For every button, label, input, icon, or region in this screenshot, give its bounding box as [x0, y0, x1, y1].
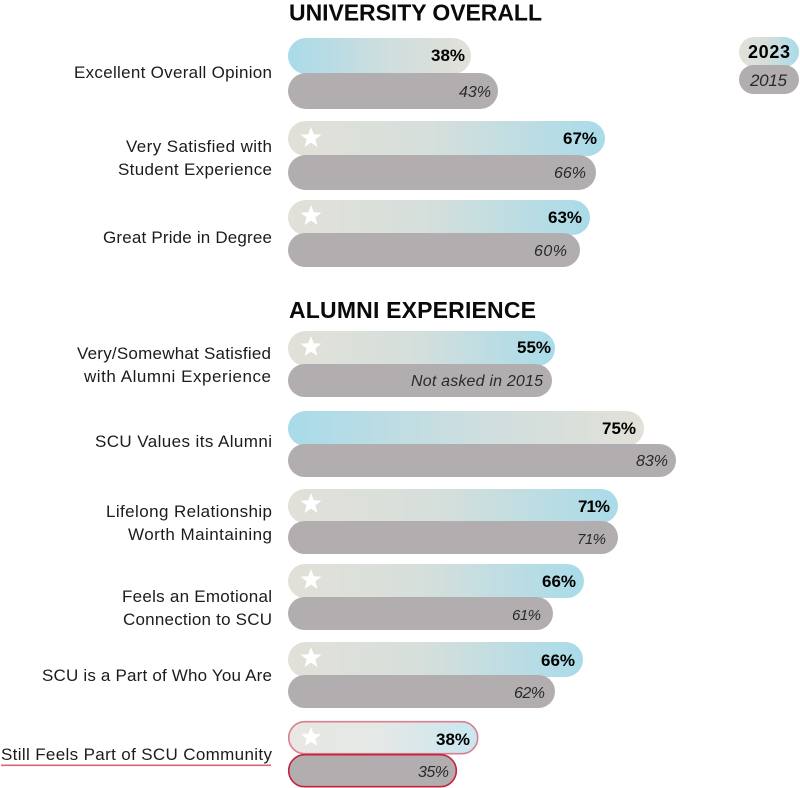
- row: Great Pride in Degree: Great Pride in Degree: [103, 228, 272, 247]
- row: Very Satisfied with Student Experience: 66%: [554, 165, 586, 182]
- heading: Alumni Experience: ALUMNI EXPERIENCE: [289, 297, 536, 323]
- row: Feels an Emotional Connection to SCU: 61%: [512, 607, 541, 624]
- row: Very Satisfied with Student Experience: [118, 121, 605, 190]
- row: Feels an Emotional Connection to SCU: Feels an Emotional: [122, 587, 272, 606]
- row: Very/Somewhat Satisfied with Alumni Experience: Very/Somewhat Satisfied: [77, 344, 271, 363]
- row: Still Feels Part of SCU Community (highlighted): [1, 722, 478, 787]
- row: Feels an Emotional Connection to SCU: [122, 564, 584, 630]
- row: Excellent Overall Opinion: [74, 38, 498, 109]
- legend: [739, 37, 799, 94]
- row: Lifelong Relationship Worth Maintaining: 71%: [577, 531, 606, 548]
- row: Very Satisfied with Student Experience: Very Satisfied with: [126, 137, 272, 156]
- legend: 2023: [748, 42, 790, 62]
- row: Very Satisfied with Student Experience: Student Experience: [118, 160, 272, 179]
- heading: University Overall: UNIVERSITY OVERALL: [289, 0, 542, 26]
- row: Still Feels Part of SCU Community (highlighted): 35%: [418, 764, 449, 781]
- row: SCU Values its Alumni: [95, 411, 676, 477]
- row: SCU Values its Alumni: 83%: [636, 453, 668, 470]
- row: Great Pride in Degree: 60%: [534, 243, 567, 260]
- row: Excellent Overall Opinion: 43%: [459, 84, 491, 101]
- row: Lifelong Relationship Worth Maintaining: Lifelong Relationship: [106, 502, 272, 521]
- row: Excellent Overall Opinion: 38%: [431, 46, 465, 65]
- row: Still Feels Part of SCU Community (highlighted): Still Feels Part of SCU Community: [1, 745, 272, 764]
- row: Feels an Emotional Connection to SCU: Connection to SCU: [123, 610, 272, 629]
- row: Very/Somewhat Satisfied with Alumni Experience: Not asked in 2015: [411, 373, 543, 390]
- row: Lifelong Relationship Worth Maintaining: Worth Maintaining: [128, 525, 272, 544]
- row: SCU is a Part of Who You Are: SCU is a Part of Who You Are: [42, 666, 272, 685]
- row: Lifelong Relationship Worth Maintaining: 71%: [578, 497, 610, 516]
- row: Excellent Overall Opinion: Excellent Overall Opinion: [74, 63, 272, 82]
- row: Very Satisfied with Student Experience: 67%: [563, 129, 597, 148]
- row: Lifelong Relationship Worth Maintaining: [106, 489, 618, 554]
- row: SCU Values its Alumni: SCU Values its Alumni: [95, 432, 272, 451]
- row: SCU Values its Alumni: 75%: [602, 419, 636, 438]
- row: Great Pride in Degree: 63%: [548, 208, 582, 227]
- row: SCU is a Part of Who You Are: 66%: [541, 651, 575, 670]
- row: Feels an Emotional Connection to SCU: 66%: [542, 572, 576, 591]
- row: SCU is a Part of Who You Are: [42, 642, 583, 708]
- row: Very/Somewhat Satisfied with Alumni Experience: 55%: [517, 338, 551, 357]
- row: Still Feels Part of SCU Community (highlighted): 38%: [436, 730, 470, 749]
- row: Very/Somewhat Satisfied with Alumni Experience: [77, 331, 555, 397]
- row: Great Pride in Degree: [103, 200, 590, 267]
- row: Very/Somewhat Satisfied with Alumni Experience: with Alumni Experience: [83, 367, 271, 386]
- legend: 2015: [749, 71, 788, 90]
- row: SCU is a Part of Who You Are: 62%: [514, 685, 545, 702]
